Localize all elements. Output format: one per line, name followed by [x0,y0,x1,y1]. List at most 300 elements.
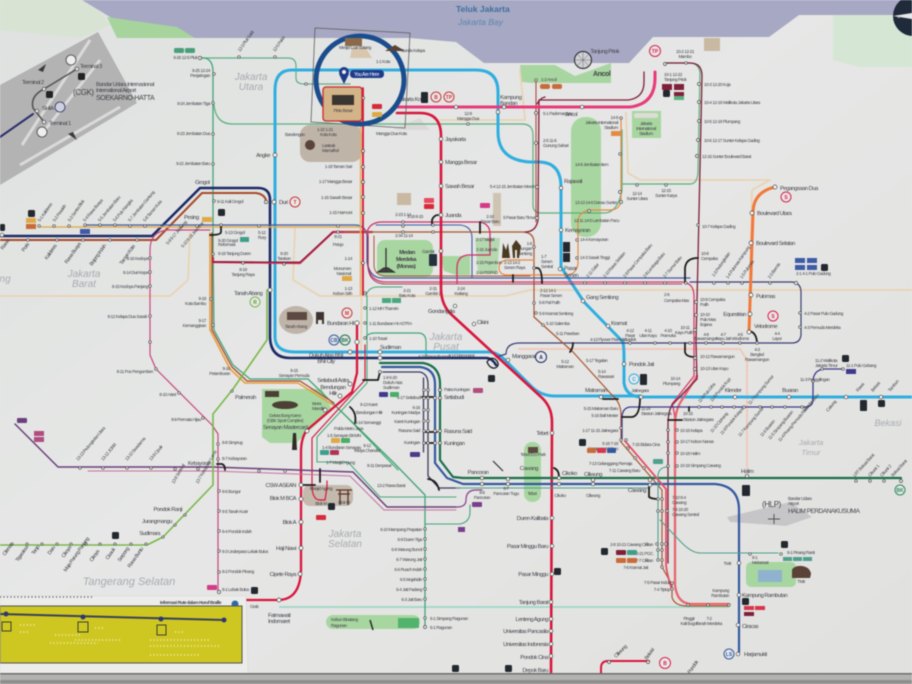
station labels: east: 5-4 12-15 Jembatan Merah [490,184,536,189]
rotated station labels: 13-9 Cipulir [148,444,164,462]
station labels: north west: Juanda [445,213,462,219]
station labels: corridor text & south: 8-1 [752,555,758,560]
station labels: east: 4-3 [754,347,761,352]
station labels: north west: Jakarta Kota [398,97,426,103]
line: navy 11 [622,369,843,440]
station labels: east: Timur [801,448,821,457]
rotated station labels: 5-3 Sentra Blok [67,198,86,223]
station labels: corridor text & south: Pancoran Tugu [493,491,520,496]
station labels: north west: 9-26 12-5 Pluit [173,55,198,60]
station labels: east: Ancol [593,71,611,78]
area names: Jakarta [429,332,463,343]
rotated station labels: LRT Bekasi Barat [852,452,876,478]
station labels: north west: Bandengan [285,132,305,137]
station labels: south west: Kuningan [404,440,421,445]
station labels: east: Velodrome [754,324,777,330]
rotated station labels: 2-10 Rawa Selatan [602,250,627,279]
station labels: north west: 1-14 [344,256,353,261]
line: blue curve [382,367,739,652]
station labels: east: Plumpang [663,381,681,386]
you are here marker: 1-1 Kota [376,59,391,64]
station labels: east: Pulomas [756,294,776,300]
station labels: east: Sunter Utara [627,196,648,201]
line and station badges: CB [330,338,338,344]
station labels: corridor text & south: Pasar Minggu [518,572,548,578]
line: green 9 corridor [200,58,425,627]
station labels: east: 14-9 [610,115,619,120]
rotated station labels: Bekasi [870,380,881,393]
station labels: east: 7-13 Gelanggang Remaja [589,461,633,466]
station labels: south west: Setiabudi [444,395,464,401]
station labels: east: 10-10 [700,312,710,317]
station labels: corridor text & south: 5-12 [561,359,570,364]
rail corridors [0,70,912,607]
rotated station labels: Kalideres [44,243,59,261]
station labels: south west: 8-4 Pondok Indah [222,529,252,534]
rotated station labels: 5-4 Rawa Buaya [82,197,104,223]
rotated station labels: 5-2 Pesakih [52,203,68,223]
station labels: corridor text & south: Ciliwung [586,493,601,498]
station labels: south west: 9-12 [363,443,372,448]
station labels: south west: 8-7 Kebayoran [222,456,247,461]
station labels: north west: Sentral [541,264,553,269]
station labels: east: Bekasi [874,418,903,428]
rotated station labels: Rawa Buntu [127,546,145,569]
station labels: corridor text & south: Tebet [536,431,549,437]
station labels: north west: 1-10 Tosari [369,336,387,341]
station labels: north west: Penjaringan [190,73,211,78]
station labels: north west: Kemanggisan [183,323,207,328]
station labels: south west: 6-7 Warung Jati [396,557,423,562]
station labels: east: Senen [564,273,579,279]
landmark: Tebet Eco Park bird [493,447,538,471]
rotated station labels: Cikunir 1 [867,463,881,478]
station labels: east: Stadium [639,131,654,136]
station labels: east: 4-2 Pasar Pulo Gadung [804,311,844,316]
station labels: south west: (GBK Sport Complex) [267,418,304,423]
station labels: corridor text & south: 7-5 Pasar Induk [644,580,671,585]
rotated station labels: 5-5 Jembatan Baru [97,194,122,223]
rotated station labels: 13-10 Swadarma [124,436,147,462]
station labels: south west: Bendungan [320,385,346,391]
line: bright red main [397,113,552,672]
station labels: east: 13-13 14-6 Danau Sunter [575,200,618,205]
line and station badges: T [293,200,297,206]
station labels: north west: 1-11 Bundaran HI ASTRA [369,321,412,326]
station labels: north west: Bundaran HI [327,321,355,327]
station labels: north west: Sawah Besar [445,184,475,190]
line: green 12 corridor [214,105,622,213]
station labels: south west: 8-11 Pos Pengumben [117,369,154,374]
station labels: east: Kampung [500,95,522,101]
station labels: east: 1-2 Ancol [541,77,557,82]
area names: Jakarta [234,72,268,83]
rotated station labels: 12-3 Pluit Sakti [237,29,255,53]
station labels: east: 10-17 Kebon Nanas [680,439,715,444]
station labels: north west: 9-25 12-24 [192,68,211,73]
station labels: corridor text & south: Mekarsari [752,560,769,565]
station labels: corridor text & south: Tebet Eco Park [520,452,547,457]
station labels: corridor text & south: Ciliwung [584,472,602,478]
station labels: east: 10-12 Rawamangun [700,354,735,359]
station labels: north west: Cikini [477,320,488,326]
station labels: east: 10-4 12-19 Walikota Jakarta Utara [704,100,761,105]
station labels: south west: Mandiri [312,406,324,411]
rotated station labels: Rawa [0,238,11,251]
station labels: east: Utan Kayu [639,333,658,338]
station labels: north west: Tarakan [277,256,292,261]
station labels: corridor text & south: HALIM PERDANAKUSUMA [788,508,861,515]
station labels: east: Pramuka [660,333,677,338]
station labels: north west: Rory [258,235,267,240]
station labels: south west: 8-6 Bungur [222,489,241,494]
station labels: corridor text & south: Kampung [712,588,730,593]
landmark: Blok M torii [336,490,352,505]
station labels: east: Jakarta International [585,120,618,125]
station labels: east: 11-3 Penggilingan [800,377,830,382]
area names: Jakarta [328,529,362,540]
station labels: north west: 1-20 [352,86,360,91]
line and station badges: LS [726,652,733,658]
landmark: Istiqlal and Katedral: 2-15 Pejambon [476,260,502,265]
station labels: north west: 9-22 Jembatan Baru [176,161,211,166]
station labels: east: Gaplek [624,337,637,342]
station labels: north west: 1-6 [527,241,533,246]
station labels: corridor text & south: 2-8 10-21 Cawang Cililitan [610,542,654,547]
station labels: south west: 6-6 Ruach Indah [394,567,423,572]
station labels: south west: 4-14 Manggarai [448,353,475,358]
station labels: east: 2-1 4-1 Pulo Gadung [796,271,831,276]
station labels: east [490,49,903,475]
you are here marker: Sunda Kelapa [401,48,426,53]
landmark: Medan Merdeka (Monas): (Monas) [397,264,416,270]
rotated station labels: Cakung [825,399,838,413]
station labels: south west: Blok M [315,501,327,506]
landmark: Kota Tua lion dance tile [305,127,339,153]
station labels: south west: Jurangmangu [142,519,172,525]
rotated station labels: 11-5 Simpang Buaran [767,409,795,441]
line: bottom red stub [601,661,649,675]
station labels: north west: Tanjung Raya [232,272,255,277]
sea: Jakarta Bay [82,0,912,63]
rotated station labels: Ciliwung [613,644,629,659]
rotated station labels: Klender Baru [802,392,820,413]
panel: Soekarno-Hatta airport: Terminal 1 [49,121,71,127]
station labels: corridor text & south: Cawang [672,500,687,505]
area names: Jakarta [67,269,101,280]
station labels: south west: 8-12 Kelapa Dua Sasak [107,314,148,319]
station labels: east: Rawamangun [694,336,719,341]
area names [0,72,463,588]
rotated station labels: Bekasi [644,647,656,661]
station labels: north west: 3-18 8-15 [407,214,424,219]
station labels: south west: 8-15 Kedoya Panjang [112,284,149,289]
station labels: north west: BNI City [317,359,335,365]
landmark: Tanah Abang market and ondel-ondel [285,312,324,329]
station labels: east: Matraman [585,388,607,394]
station labels: corridor text & south: TMII [797,579,805,584]
station labels: corridor text & south: 7-4 Tiptop [654,587,671,592]
label: Jakarta Bay: Teluk Jakarta [456,4,510,14]
line: salmon double [675,376,729,604]
station labels: corridor text & south: Tanjung Barat [519,600,549,606]
station labels: south west: 6-10 Mampang Prapatan [380,527,423,532]
station labels: north west: Gondangdia [428,309,456,315]
station labels: east: Boulevard Utara [757,211,793,217]
line: blue [85,225,690,278]
line: green central [365,333,426,358]
station labels: east: 4-4 [774,331,781,336]
station labels: corridor text & south: Matraman [556,364,574,369]
station labels: corridor text & south: Tebet [527,491,538,496]
station labels: south west: 6-1 Simpang Ragunan [430,616,469,621]
station labels: corridor text & south: Pasar Minggu Baru [507,544,548,550]
you are here marker: Mesjid Luar Batang [339,45,372,50]
line: red double 8-20 [213,232,372,263]
station labels: east: 4-12 [626,328,635,333]
area names: Barat [72,279,97,290]
landmark: Medan Merdeka (Monas): Medan [399,250,416,256]
line and station badges: TP [652,49,659,55]
rotated station labels: 13-12 JORR [100,441,118,462]
station labels: corridor text & south: 7-2 [706,616,713,621]
station labels: north west: Dukuh Atas BNI [309,353,344,359]
station labels: south west: 1-7 Masjid Agung [326,460,356,465]
station labels: north west: 2-16 [486,214,495,219]
station labels: corridor text & south: 5-17 Tegalan [586,358,608,363]
station labels: corridor text & south: Ciracas [742,624,759,630]
station labels: south west: Kuningan Madya [392,410,421,415]
station labels: north west: 9-17 [198,318,207,323]
station labels: south west: Kuningan [444,441,465,447]
line and station badges: S [784,195,788,201]
compass [893,0,912,36]
station labels: south west: Karet Kuningan [394,419,421,424]
station labels: north west: 2-23 1-14 [395,212,412,217]
station labels: south west: Ragunan [331,623,347,628]
line: purple Kebayoran [15,424,456,507]
landmark: Kota Tua lion dance tile: Mamalhol [322,148,339,153]
rotated station labels: 1-3 Pedongkelan [711,251,732,278]
station labels: north west: 9-24 Jembatan Tiga [177,101,211,106]
station labels: east: 11-1 Pulo Gebang [846,363,877,368]
station labels: south west: 6-16 [412,405,421,410]
station labels: north west: 9-20 Grogol [218,238,238,243]
station labels: corridor text & south [468,354,861,674]
station labels: east: 5-1 Pademangan [543,111,573,116]
station labels: east: 10-9 Cempaka [700,297,726,302]
station labels: north west: 9-11 Kali Grogol [217,199,243,204]
line: dark green [380,363,901,478]
station labels: east: 4-10 [664,328,673,333]
station labels: east: 4-13 Flyover Pramuka [590,337,628,342]
station labels: corridor text & south: TMII [724,561,731,566]
station labels: south west: 8-14 Duri Kepa [123,270,149,275]
rotated station labels: 11-4 Pinang Pemuda Rawa [777,404,811,443]
station labels: east: Pulo Mas [700,317,717,322]
rotated station labels: Tigaraksa [15,544,30,563]
station labels: south west: Indomaret [268,619,290,625]
rotated station labels: 5-6 Pulo Nangka [112,197,134,223]
station labels: south west: Rasuna Said [444,429,472,435]
area names: Selatan [328,539,362,550]
bottom frame of the map [0,673,912,684]
station labels: north west: 8-20 [280,251,289,256]
station labels: north west: Petojo [333,242,344,247]
rotated station labels: 13-8 Seskoal [171,463,186,484]
rotated station labels: Bekasi Barat [890,458,909,478]
station labels: east: 1-17 11-15 Jatinegara [582,428,619,433]
station labels: east: Jatinegara [631,388,649,393]
area names: Tangerang Selatan [83,576,175,588]
station labels: east: Cempaka Mas [664,298,690,303]
panel: braille information card [0,596,248,675]
panel: Soekarno-Hatta airport: SOEKARNO-HATTA [96,95,155,102]
station labels: east: 10-6 12-17 Sunter Kelapa Gading [704,138,760,143]
station labels: east: 14-8 Jembatan Item [575,162,609,167]
station labels: north west: Sudirman [380,345,401,351]
line: lime Tangerang Selatan [0,290,267,545]
station labels: east: Stadium [604,125,619,130]
station labels: north west: 8-21 [334,234,343,239]
station labels: east: 11-24 [641,406,651,411]
station labels: east: Kramat [611,321,628,327]
you are here marker: Pintu Besar [333,108,353,113]
station labels: corridor text & south: Cawang Sentral [672,512,699,517]
line: navy corridor [0,188,496,365]
station labels: east: Kemayoran [565,228,590,234]
station labels: corridor text & south: Pinggir [683,616,696,621]
station labels: corridor text & south: 7-7 Cililitan [636,558,654,563]
compass: U [897,14,900,19]
station labels: north west: Pasar Senen [540,293,563,298]
station labels: east: 4-3 Pemuda Merdeka [804,325,841,330]
station labels: corridor text & south: Kali Bogor [681,621,698,626]
landmark: Tanah Abang market and ondel-ondel: Tanah Abang [285,324,308,329]
station labels: north west: Pasar Baru [481,219,500,224]
station labels: south west: Hilir [329,391,337,397]
station labels: east: International [636,126,656,131]
rotated station labels: Rawa Buaya [64,241,83,265]
station labels: south west: Sudirman [383,385,400,390]
rotated station labels: Cisauk [105,546,118,561]
station labels: east: Tanjung Priok [664,77,687,82]
station labels: north west: Angke [256,153,270,159]
station labels: east: Pasar [564,266,577,272]
line and station badges: R [253,300,257,306]
line: pink magenta 8 [150,230,218,592]
station labels: east: 14-3 Sasak Tinggi [580,255,610,260]
station labels: east: Mambo [678,54,692,59]
station labels: north west: 1-12 MH Thamrin [369,306,399,311]
station labels: south west: 13-2 Rawa Barat [377,483,406,488]
station labels: east: 10-19 Simpang Cawang [680,463,722,468]
station labels: east: Stasiun Jatinegara [641,411,672,416]
landmark: Blok M torii: Blok M [338,500,350,505]
station labels: corridor text & south: Harjamukti [744,652,767,658]
station labels: south west: 6-9 Duren Tiga [398,537,423,542]
station labels: east: 10-3 12-20 Koja [704,82,731,87]
station labels: east: 10-18 Halim [680,451,701,456]
rotated station labels: 11-6 Buaran [759,418,776,438]
station labels: east: 11-2 Walikota [815,358,838,363]
area names: Utara [239,82,264,93]
station labels: south west: 6-3 Jati Baru [401,597,423,602]
rotated station labels: 5-10 9-18 Jelambar [180,220,205,249]
station labels: east: Gunung Sahari [543,143,569,148]
station labels: south west: 9-15 [290,368,299,373]
station labels: east: 4-11 [644,328,652,333]
rotated station labels: Serpong [117,546,131,563]
panel: braille information card: Informasi Rute dalam Huruf Braille [160,600,222,605]
rotated station labels: 11-9 Pondok Kelapa [719,406,745,436]
station labels: south west: Istora [312,401,322,406]
rotated station labels: Tenjo [31,544,42,556]
station labels: north west: Gambir 2 [425,291,442,296]
station labels: corridor text & south: Rambutan [711,593,730,598]
station labels: east: 4-5 [737,332,744,337]
station labels: east: 14-4 Kemayoran [580,237,609,242]
panel: Soekarno-Hatta airport: Terminal 2 [22,80,44,86]
station labels: north west: 5-11 Paseban [556,331,580,336]
station labels: south west: 4-21 Pasar Rumput [418,354,452,359]
station labels: corridor text & south: (HLP) [762,500,782,509]
line and station badges: TP [446,95,453,101]
station labels: east: Boulevard Selatan [756,241,795,247]
panel: Soekarno-Hatta airport: SHIA [42,106,54,112]
line: pink-red loop around Monas [367,222,490,283]
station labels: south west: Cipete Raya [270,572,297,578]
line: rust corridor [0,193,266,240]
station labels: south west: Senayan Mastercard [263,425,308,431]
station labels: north west: Senen Raya [504,265,526,270]
station labels: south west: Kebayoran [188,461,211,467]
station labels: north west: Jayakarta [445,137,467,143]
station labels: north west: 5-9 Kramat Sentiong [539,311,574,316]
station labels: north west: 5-8 Pal Putih [539,300,561,305]
station labels: north west: Gunungan [514,246,533,251]
station labels: north west [173,55,580,365]
station labels: east: Jakarta [640,121,653,126]
station labels: north west: Mangga Dua Kota [376,131,407,136]
station labels: south west: 9-14 Semanggi [355,420,381,425]
line: pink red lower cluster [625,441,672,590]
station labels: south west [107,256,475,630]
station labels: corridor text & south: Pancoran [474,495,491,500]
station labels: north west: 1-18 Taman Sari [325,164,352,169]
line and station badges: B [663,661,667,667]
station labels: south west: Rasuna Said [398,428,421,433]
station labels: east: Equestrian [723,312,746,318]
station labels: east: Bengkel [750,352,764,357]
station labels: north west: 12-8 [464,111,473,116]
panel: braille information card: Route Information in Braille [178,605,223,610]
green Ragunan icon bars [370,618,419,630]
station labels: corridor text & south: Airport [788,501,800,506]
landmark: Medan Merdeka (Monas): Merdeka [396,257,417,263]
line: light blue corridor [456,70,912,397]
station labels: corridor text & south: Pancoran [468,470,489,476]
station labels: north west: Nasional [337,271,351,276]
line: purple thin cluster [383,372,460,488]
station labels: north west: 2-31 [429,286,438,291]
station labels: east: Buaran [782,388,798,394]
rotated station labels: 5-8 Taman Kota [142,199,163,223]
station labels: east: 5-15 Matraman Baru [584,406,619,411]
station labels: corridor text & south: Cikoko [562,471,577,477]
station labels: corridor text & south: Universitas Indonesia [503,642,549,648]
station labels: east: 10-14 [670,376,681,381]
